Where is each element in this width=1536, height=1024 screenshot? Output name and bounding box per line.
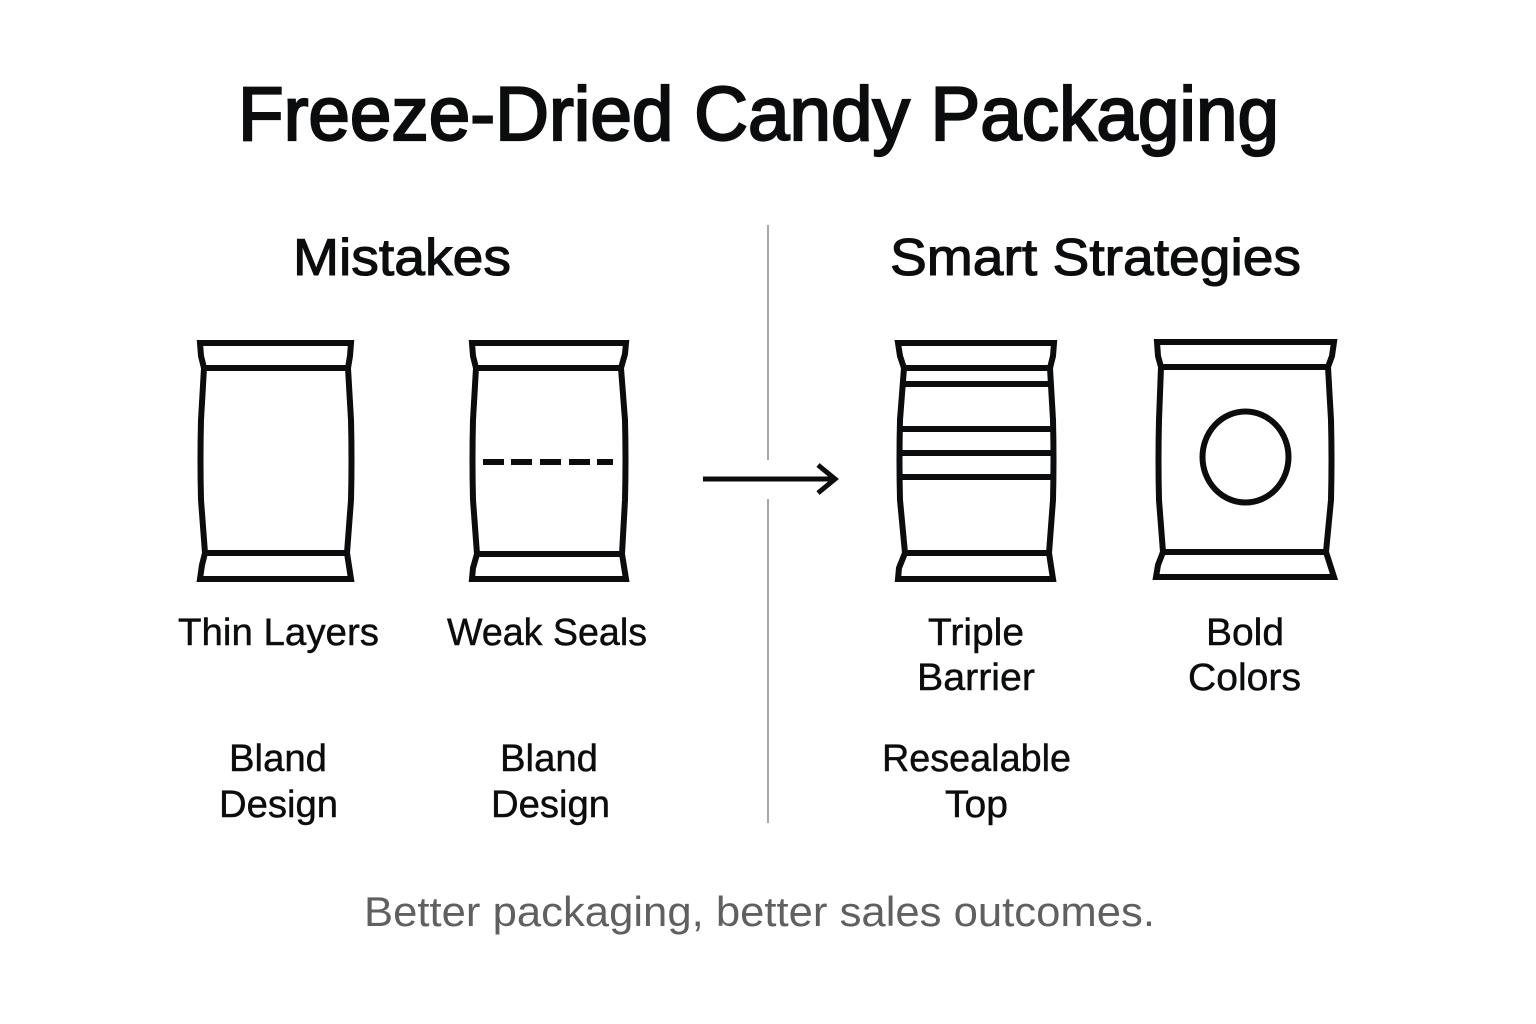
arrow: [703, 465, 835, 493]
label: bold colors: [1188, 612, 1301, 699]
icon: triple barrier bag: [898, 343, 1054, 579]
weak seal dashed line: [483, 459, 613, 465]
footer tagline: Better packaging, better sales outcomes.: [364, 888, 1155, 935]
label: triple barrier: [917, 612, 1035, 699]
heading: mistakes: Mistakes: [293, 229, 511, 287]
title: Freeze-Dried Candy Packaging: [238, 72, 1279, 157]
label: bold colors: Colors: [1188, 657, 1301, 699]
label: weak seals: Weak Seals: [447, 612, 647, 654]
bold colors circle: [1202, 412, 1288, 502]
label: bland design left: Bland: [229, 738, 327, 780]
center divider: [767, 225, 769, 823]
label: resealable top: Resealable: [882, 738, 1071, 780]
label: bland design left: [219, 738, 338, 826]
label: triple barrier: Barrier: [917, 657, 1035, 699]
label: resealable top: [882, 738, 1071, 826]
label: bland design right: [491, 738, 610, 826]
label: resealable top: Top: [945, 784, 1008, 826]
label: triple barrier: Triple: [928, 612, 1024, 654]
icon: bold colors bag: [1156, 342, 1334, 577]
label: bland design left: Design: [219, 784, 338, 826]
label: thin layers: Thin Layers: [178, 612, 379, 654]
icon: thin layers bag: [200, 343, 352, 579]
heading: smart strategies: Smart Strategies: [890, 229, 1301, 287]
label: bland design right: Bland: [500, 738, 598, 780]
icon: weak seals bag: [472, 343, 626, 579]
label: bold colors: Bold: [1206, 612, 1284, 654]
label: bland design right: Design: [491, 784, 610, 826]
